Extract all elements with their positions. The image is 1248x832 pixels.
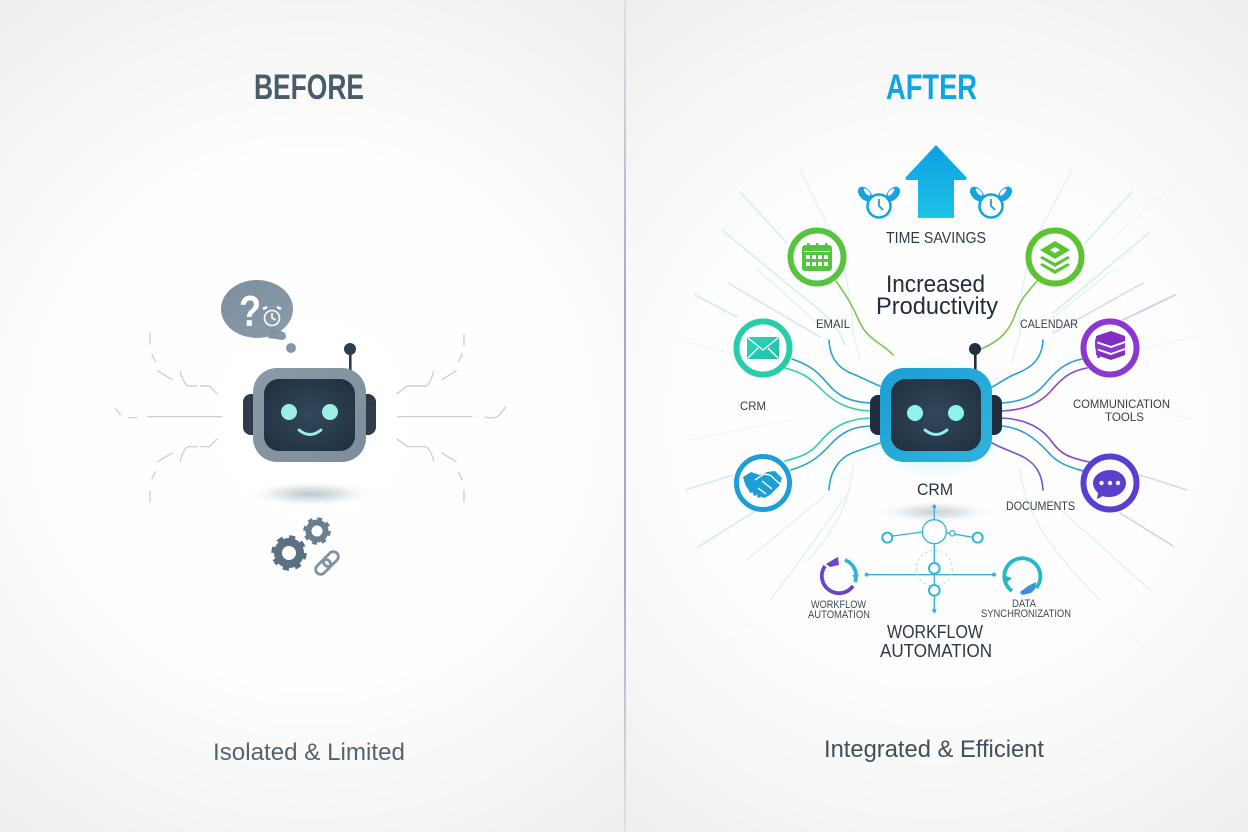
icon: data sync cycle [1003, 558, 1040, 595]
icon: handshake [736, 456, 790, 510]
caption: before: Isolated & Limited [213, 739, 405, 766]
label: time savings: TIME SAVINGS [886, 230, 986, 247]
icon: calendar [790, 230, 844, 284]
before robot shadow [245, 481, 377, 507]
label: communication tools: COMMUNICATION [1073, 397, 1170, 411]
antenna [344, 343, 356, 372]
before: disconnected dashed lines [115, 333, 506, 503]
panel divider [624, 0, 626, 832]
label: calendar: CALENDAR [1020, 317, 1078, 331]
label: workflow automation: WORKFLOW [887, 622, 983, 642]
heading: before: BEFORE [254, 68, 364, 107]
after robot glow and shadow [858, 356, 1014, 524]
icon: layers [1028, 230, 1082, 284]
label: small workflow automation [808, 599, 870, 621]
screen [891, 379, 981, 451]
connectors: right side [992, 340, 1089, 490]
label: crm left: CRM [740, 399, 766, 413]
connectors: left side [785, 340, 880, 490]
label: increased productivity: Productivity [876, 293, 998, 320]
head [880, 368, 992, 462]
ears [870, 395, 1002, 435]
connector: layers to robot [981, 281, 1037, 349]
face [907, 405, 964, 434]
head [253, 368, 366, 462]
label: small workflow automation: WORKFLOW [811, 599, 867, 611]
icon: alarm clock right [967, 184, 1015, 218]
label: workflow automation [880, 622, 992, 661]
label: documents: DOCUMENTS [1006, 499, 1075, 513]
icon: workflow automation cycle [822, 557, 859, 593]
panel: before background [0, 0, 624, 832]
icon: gears and chain link [274, 519, 340, 576]
icon: up arrow [905, 145, 967, 218]
ears [243, 394, 376, 435]
panel: after background [626, 0, 1248, 832]
icon: books stack [1084, 322, 1136, 374]
workflow network diagram [865, 505, 996, 613]
label: communication tools [1073, 397, 1170, 424]
after: connector lines from robot to tools [785, 281, 1089, 490]
label: workflow automation: AUTOMATION [880, 641, 992, 661]
face [281, 404, 338, 434]
icon: alarm clock left [855, 184, 903, 218]
label: increased productivity [876, 271, 998, 320]
icon: thought bubble with question mark and clock [221, 280, 296, 353]
before robot [243, 343, 376, 462]
label: email: EMAIL [816, 317, 850, 331]
screen [264, 379, 355, 451]
heading: after: AFTER [886, 68, 977, 107]
icon: thought bubble with question mark and clock: ? [239, 287, 261, 336]
connector: calendar to robot [836, 281, 893, 355]
after robot [870, 343, 1002, 462]
label: data synchronization [981, 598, 1071, 620]
label: increased productivity: Increased [886, 271, 985, 298]
label: data synchronization: SYNCHRONIZATION [981, 608, 1071, 620]
caption: after: Integrated & Efficient [824, 736, 1044, 763]
label: data synchronization: DATA [1012, 598, 1037, 610]
label: crm center: CRM [917, 480, 953, 499]
antenna [969, 343, 981, 372]
label: small workflow automation: AUTOMATION [808, 609, 870, 621]
icon: chat bubble [1084, 456, 1136, 510]
tool labels [740, 317, 1170, 513]
label: communication tools: TOOLS [1105, 410, 1144, 424]
icon: envelope [736, 322, 790, 374]
after: faint radiating lines [680, 170, 1200, 650]
